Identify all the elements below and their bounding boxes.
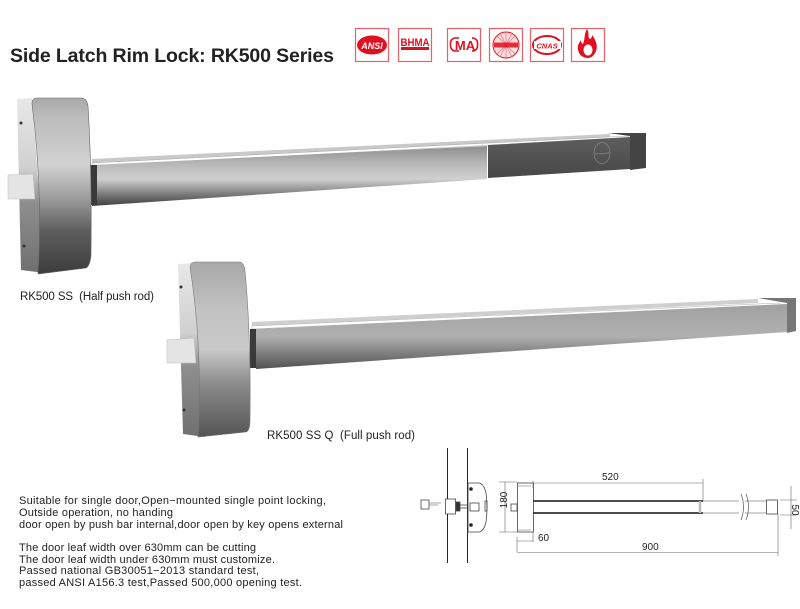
dark bar bbox=[488, 137, 630, 178]
icon: CNAS: CNAS bbox=[536, 42, 558, 50]
description text bbox=[19, 495, 343, 589]
key and cylinder bbox=[421, 499, 467, 514]
dimension labels bbox=[499, 472, 800, 553]
rail bbox=[252, 299, 758, 326]
door section bbox=[448, 448, 468, 563]
description text: passed ANSI A156.3 test,Passed 500,000 opening test. bbox=[19, 577, 302, 589]
description text: The door leaf width under 630mm must customize. bbox=[19, 554, 275, 566]
dimension labels: 50 bbox=[789, 504, 800, 516]
description text: The door leaf width over 630mm can be cutting bbox=[19, 542, 256, 554]
dimension lines bbox=[499, 479, 797, 556]
bar socket bbox=[250, 329, 256, 368]
product: full push rod lock bbox=[167, 262, 796, 437]
front face bbox=[190, 262, 250, 437]
technical drawing bbox=[421, 448, 800, 563]
icon: flame bbox=[572, 28, 604, 62]
description text: Suitable for single door,Open−mounted single point locking, bbox=[19, 495, 326, 507]
dimension labels: 60 bbox=[538, 533, 550, 544]
end cap bbox=[608, 133, 646, 170]
lock side profile bbox=[468, 483, 487, 532]
icon: CMA bbox=[448, 28, 480, 62]
end mark bbox=[594, 142, 610, 164]
product: half push rod lock bbox=[8, 98, 646, 274]
description text: Passed national GB30051−2013 standard test, bbox=[19, 565, 259, 577]
icon: ANSI bbox=[356, 28, 388, 62]
bar bbox=[256, 304, 787, 369]
description text: Outside operation, no handing bbox=[19, 507, 173, 519]
icon: ANSI: ANSI bbox=[360, 41, 383, 51]
dimension labels: 180 bbox=[499, 491, 510, 508]
silver bar bbox=[92, 146, 487, 206]
back plate bbox=[178, 263, 205, 437]
front face bbox=[32, 98, 91, 274]
bar socket bbox=[90, 165, 97, 205]
end cap bbox=[758, 298, 796, 333]
icon: BHMA: BHMA bbox=[400, 37, 430, 49]
caption: full push rod: RK500 SS Q (Full push rod) bbox=[267, 430, 415, 442]
caption: half push rod: RK500 SS (Half push rod) bbox=[20, 291, 154, 303]
latch bbox=[167, 338, 196, 363]
dimension labels: 520 bbox=[602, 472, 619, 483]
icon: BHMA bbox=[398, 28, 432, 62]
title: Side Latch Rim Lock: RK500 Series bbox=[10, 45, 334, 67]
dimension labels: 900 bbox=[642, 542, 659, 553]
front elevation bbox=[511, 483, 778, 532]
description text: door open by push bar internal,door open by key opens external bbox=[19, 519, 343, 531]
back plate bbox=[17, 98, 45, 273]
icon: CNAS bbox=[530, 28, 564, 62]
icon: round seal bbox=[490, 28, 522, 62]
icon: CMA: MA bbox=[455, 38, 476, 53]
latch bbox=[8, 174, 35, 199]
rail bbox=[92, 134, 610, 164]
certification icons bbox=[356, 28, 604, 62]
